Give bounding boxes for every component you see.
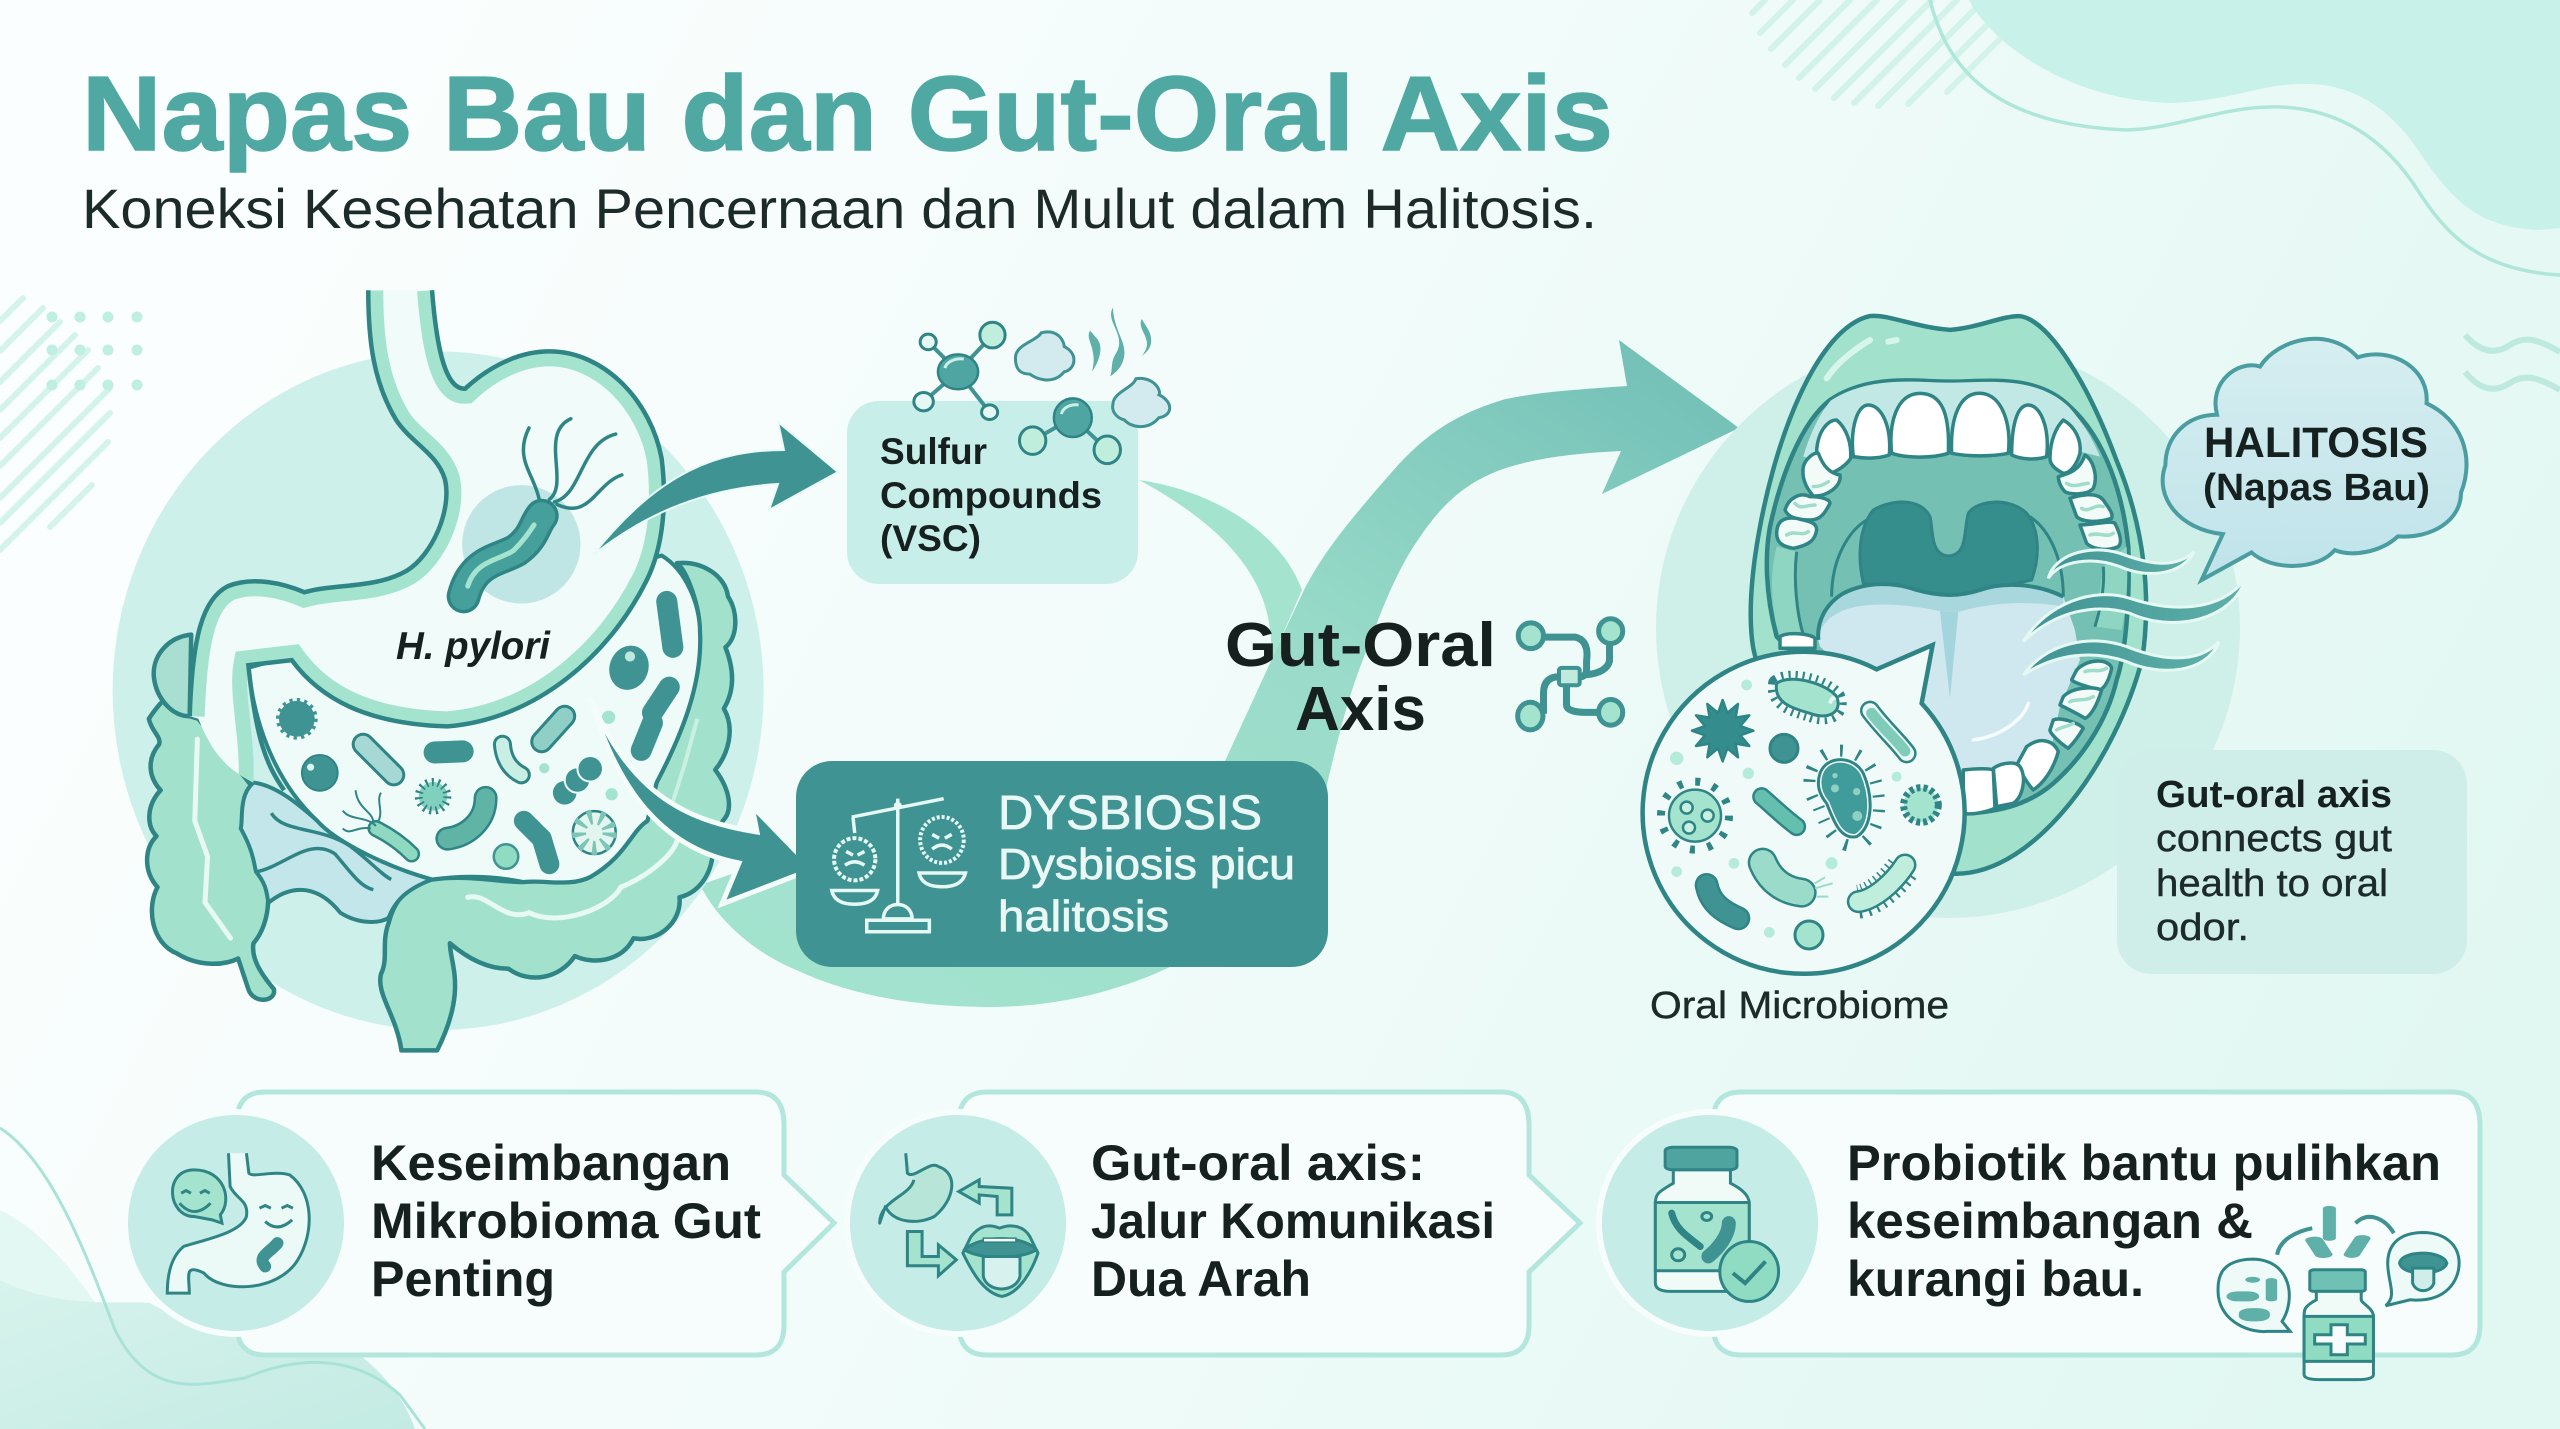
speech bubble: halitosis bbox=[2163, 339, 2467, 580]
icon: H. pylori bacterium bbox=[462, 419, 622, 603]
text: note bbox=[2156, 774, 2392, 949]
icon: scale with angry microbes bbox=[832, 799, 965, 932]
stomach bbox=[190, 290, 664, 790]
panel: gut illustration bbox=[113, 290, 764, 1050]
text: note: odor. bbox=[2156, 907, 2249, 949]
magnifier: oral microbiome bbox=[1643, 645, 1965, 974]
text: Keseimbangan bbox=[371, 1135, 731, 1191]
text bbox=[1847, 1135, 2441, 1307]
lips bbox=[1751, 316, 2146, 874]
text: sulfur compounds: Sulfur bbox=[880, 431, 987, 472]
text bbox=[371, 1135, 761, 1307]
text: Probiotik bantu pulihkan bbox=[1847, 1135, 2441, 1191]
icon: stomach, arrows and mouth bbox=[880, 1153, 1038, 1296]
text: dysbiosis bbox=[998, 787, 1295, 941]
card: probiotik bbox=[1596, 1092, 2480, 1380]
text bbox=[1091, 1135, 1495, 1307]
subtitle: Koneksi Kesehatan Pencernaan dan Mulut dalam Halitosis. bbox=[82, 177, 1597, 240]
card: keseimbangan mikrobioma bbox=[122, 1092, 834, 1355]
colon bbox=[147, 563, 735, 1050]
label: H. pylori: H. pylori bbox=[396, 625, 551, 668]
text: Mikrobioma Gut bbox=[371, 1193, 761, 1249]
text: Gut-oral axis: bbox=[1091, 1135, 1425, 1191]
text: dysbiosis: DYSBIOSIS bbox=[998, 787, 1262, 840]
text: kurangi bau. bbox=[1847, 1251, 2144, 1307]
text: note: connects gut bbox=[2156, 818, 2392, 860]
waves: bad breath bbox=[2023, 550, 2246, 675]
microbes bbox=[1661, 679, 1938, 949]
label: gut-oral axis: Axis bbox=[1295, 675, 1426, 744]
arrow: stomach to sulfur compounds bbox=[593, 422, 838, 555]
text: Dua Arah bbox=[1091, 1251, 1311, 1307]
icon circle bbox=[1596, 1109, 1824, 1337]
icon: axis circuit bbox=[1518, 619, 1623, 730]
text: sulfur compounds: Compounds bbox=[880, 475, 1102, 516]
teeth bbox=[1777, 393, 2120, 814]
icon circle bbox=[122, 1109, 350, 1337]
text: keseimbangan & bbox=[1847, 1193, 2253, 1249]
mouth interior bbox=[1767, 340, 2129, 814]
arrow: gut to dysbiosis bbox=[590, 698, 813, 904]
icon circle bbox=[844, 1109, 1072, 1337]
label: gut-oral axis: Gut-Oral bbox=[1225, 611, 1496, 680]
card: jalur komunikasi bbox=[844, 1092, 1580, 1355]
label: gut-oral axis bbox=[1225, 611, 1496, 744]
gut bacteria bbox=[279, 601, 673, 869]
text: halitosis: HALITOSIS bbox=[2204, 419, 2428, 467]
text: halitosis: (Napas Bau) bbox=[2203, 467, 2430, 509]
panel: gut-oral axis note bbox=[2117, 750, 2467, 974]
icon: molecules and odor clouds bbox=[914, 308, 1170, 464]
text: sulfur compounds bbox=[880, 431, 1102, 559]
mouth background circle bbox=[1656, 338, 2240, 918]
panel: sulfur compounds bbox=[847, 308, 1170, 584]
text: dysbiosis: halitosis bbox=[998, 892, 1169, 941]
icon: probiotic bottle with check bbox=[1655, 1147, 1779, 1301]
text: sulfur compounds: (VSC) bbox=[880, 518, 981, 559]
text: dysbiosis: Dysbiosis picu bbox=[998, 840, 1295, 889]
small intestine bbox=[241, 783, 432, 922]
text: Penting bbox=[371, 1251, 555, 1307]
text: halitosis bbox=[2203, 419, 2430, 509]
panel: dysbiosis bbox=[796, 761, 1328, 967]
panel: mouth illustration bbox=[1656, 316, 2240, 918]
arrow: gut-oral axis flow bbox=[700, 340, 1739, 1007]
text: note: health to oral bbox=[2156, 863, 2388, 905]
text: Jalur Komunikasi bbox=[1091, 1193, 1495, 1249]
icon: happy stomach bbox=[167, 1153, 309, 1293]
label: oral microbiome: Oral Microbiome bbox=[1650, 985, 1949, 1027]
microbiome area bbox=[248, 556, 700, 882]
title: Napas Bau dan Gut-Oral Axis bbox=[82, 55, 1613, 173]
gut background circle bbox=[113, 351, 764, 1030]
icon: probiotic restores balance bbox=[2218, 1206, 2459, 1380]
text: note: Gut-oral axis bbox=[2156, 774, 2392, 816]
tongue bbox=[1818, 584, 2080, 773]
